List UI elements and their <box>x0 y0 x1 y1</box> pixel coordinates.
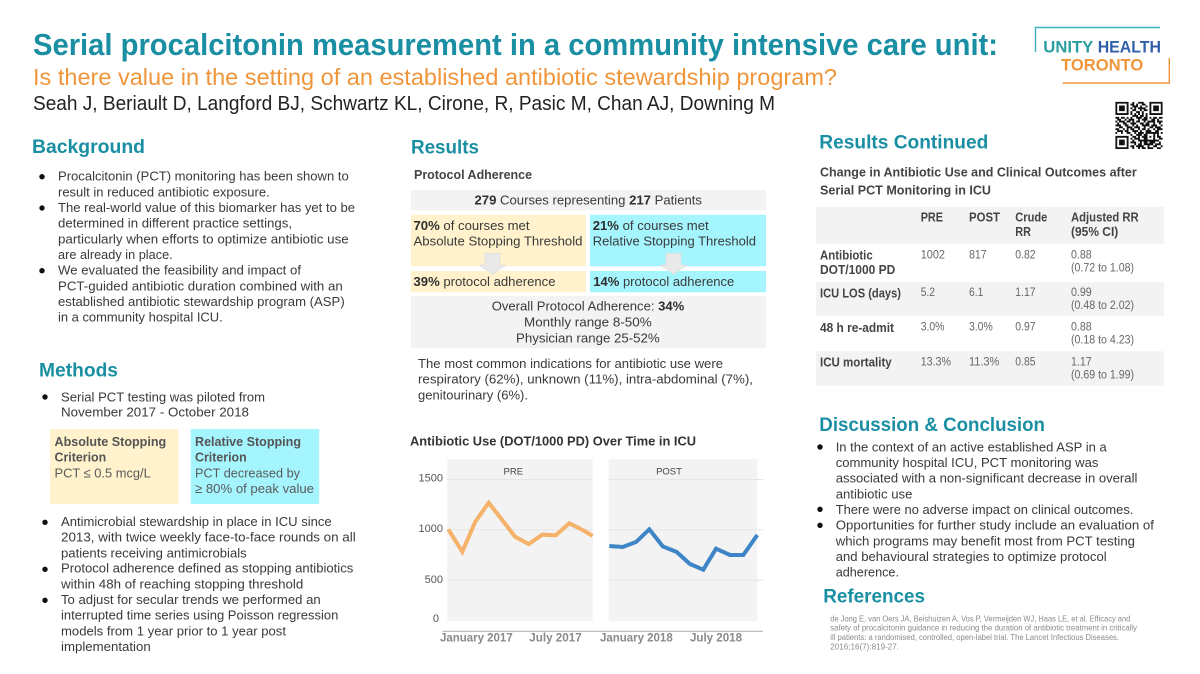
logo: Unity Health Toronto: HEALTH <box>1098 39 1161 57</box>
callout: absolute stopping criterion: Absolute Stopping <box>54 434 166 449</box>
box: absolute adherence: 39% protocol adherence <box>414 274 556 289</box>
methods bullet list: patients receiving antimicrobials <box>61 545 247 560</box>
panel: results continued <box>816 132 1164 386</box>
background bullet list: PCT-guided antibiotic duration combined with an <box>58 278 343 293</box>
row: ICU mortality: 0.85 <box>1015 356 1036 368</box>
row: 48 h re-admit: 0.88 <box>1071 322 1092 334</box>
panel label: PRE: PRE <box>504 466 523 477</box>
row: ICU mortality: (0.69 to 1.99) <box>1071 369 1134 381</box>
box: overall adherence: Physician range 25-52% <box>516 330 660 345</box>
heading: results continued: Results Continued <box>819 132 988 154</box>
row: ICU mortality: ICU mortality <box>820 356 892 370</box>
table header: RR <box>1015 225 1031 239</box>
row: 48 h re-admit: 3.0% <box>921 322 944 334</box>
background bullet list: in a community hospital ICU. <box>58 310 223 325</box>
discussion bullet list: There were no adverse impact on clinical outcomes. <box>836 502 1133 517</box>
background bullet list: result in reduced antibiotic exposure. <box>58 184 270 199</box>
box: relative threshold <box>590 215 766 266</box>
callout: absolute stopping criterion <box>50 429 178 504</box>
methods bullet list: implementation <box>61 639 151 654</box>
discussion bullet list: Opportunities for further study include an evaluation of <box>836 518 1154 533</box>
box: relative threshold: Relative Stopping Threshold <box>593 233 756 248</box>
stat bar: courses and patients <box>411 190 766 210</box>
subtitle: Is there value in the setting of an established antibiotic stewardship program? <box>33 64 837 90</box>
row: antibiotic DOT: (0.72 to 1.08) <box>1071 262 1134 274</box>
row: ICU LOS: 1.17 <box>1015 287 1036 299</box>
reference citation: ill patients: a randomised, controlled, open-label trial. The Lancet Infectious Diseases. <box>830 632 1119 642</box>
reference citation: de Jong E, van Oers JA, Beishuizen A, Vos P, Vermeijden WJ, Haas LE, et al. Efficacy and <box>830 613 1130 623</box>
callout: relative stopping criterion: PCT decreased by <box>195 465 300 480</box>
table caption: Serial PCT Monitoring in ICU <box>820 183 991 198</box>
row: antibiotic DOT: DOT/1000 PD <box>820 263 895 277</box>
row: ICU mortality: 13.3% <box>921 356 951 368</box>
row: ICU LOS: (0.48 to 2.02) <box>1071 300 1134 312</box>
y axis labels: 500 <box>425 574 443 586</box>
background bullet list: The real-world value of this biomarker has yet to be <box>58 200 355 215</box>
table header: (95% CI) <box>1071 225 1118 239</box>
panel: background <box>32 136 355 325</box>
row: ICU mortality <box>820 356 1134 381</box>
table header: Adjusted RR <box>1071 211 1139 225</box>
x axis labels: July 2017 <box>529 633 582 645</box>
box: absolute threshold: 70% of courses met <box>414 218 530 233</box>
text: common indications: respiratory (62%), unknown (11%), intra-abdominal (7%), <box>418 372 753 387</box>
text: common indications: The most common indications for antibiotic use were <box>418 356 723 371</box>
reference citation <box>830 613 1138 651</box>
box: overall adherence: Overall Protocol Adherence: 34% <box>492 299 684 314</box>
methods bullet list: Protocol adherence defined as stopping antibiotics <box>61 561 354 576</box>
x axis labels <box>440 633 743 645</box>
icon: QR code <box>1115 102 1163 150</box>
row: ICU LOS <box>820 286 1134 312</box>
y axis labels: 1000 <box>419 523 443 535</box>
discussion bullet list <box>817 439 1154 580</box>
box: absolute threshold <box>411 215 586 266</box>
y axis labels <box>419 473 443 625</box>
methods bullet list: within 48h of reaching stopping threshold <box>60 576 303 591</box>
row: 48 h re-admit <box>820 321 1134 347</box>
row: ICU LOS: 0.99 <box>1071 287 1092 299</box>
row: ICU LOS: 6.1 <box>969 287 983 299</box>
callout: relative stopping criterion: Criterion <box>195 450 247 465</box>
panel: discussion and conclusion <box>817 414 1154 580</box>
table caption: Change in Antibiotic Use and Clinical Outcomes after <box>820 165 1137 180</box>
heading: discussion and conclusion: Discussion & Conclusion <box>819 414 1045 436</box>
chart panel: pre <box>447 459 593 621</box>
background bullet list: We evaluated the feasibility and impact of <box>58 263 301 278</box>
box: relative threshold: 21% of courses met <box>593 218 709 233</box>
discussion bullet list: In the context of an active established ASP in a <box>836 439 1107 454</box>
row: ICU mortality: 1.17 <box>1071 356 1092 368</box>
background bullet list <box>39 169 355 325</box>
row: antibiotic DOT: Antibiotic <box>820 248 873 262</box>
discussion bullet list: adherence. <box>836 565 899 580</box>
logo: Unity Health Toronto: TORONTO <box>1061 57 1143 75</box>
methods bullet: pilot dates: Serial PCT testing was piloted from <box>61 389 265 404</box>
row: ICU LOS: 5.2 <box>921 287 935 299</box>
box: relative adherence <box>590 271 766 292</box>
methods bullet list: Antimicrobial stewardship in place in ICU since <box>61 514 332 529</box>
x axis labels: January 2018 <box>600 633 673 645</box>
background bullet list: established antibiotic stewardship program (ASP) <box>58 294 345 309</box>
row: antibiotic DOT <box>820 248 1134 277</box>
callout: absolute stopping criterion: PCT ≤ 0.5 mcg/L <box>54 465 151 480</box>
line: post period <box>609 529 757 570</box>
x axis labels: January 2017 <box>440 633 513 645</box>
callout: relative stopping criterion <box>191 429 319 504</box>
heading: methods: Methods <box>39 360 118 382</box>
box: absolute threshold: Absolute Stopping Threshold <box>414 233 582 248</box>
discussion bullet list: community hospital ICU, PCT monitoring was <box>836 455 1099 470</box>
callout: relative stopping criterion: ≥ 80% of peak value <box>195 481 314 496</box>
table header: PRE <box>921 211 943 225</box>
box: overall adherence: Monthly range 8-50% <box>524 315 652 330</box>
callout: relative stopping criterion: Relative Stopping <box>195 434 301 449</box>
logo: Unity Health Toronto: UNITY <box>1043 39 1093 57</box>
table header: POST <box>969 211 1000 225</box>
stat bar: courses and patients: 279 Courses representing 217 Patients <box>474 193 702 208</box>
box: overall adherence <box>411 296 766 348</box>
table header: Crude <box>1015 211 1047 225</box>
panel: results <box>411 136 766 402</box>
discussion bullet list: which programs may benefit most from PCT testing <box>835 533 1135 548</box>
authors: Seah J, Beriault D, Langford BJ, Schwartz KL, Cirone, R, Pasic M, Chan AJ, Downing M <box>33 92 775 115</box>
row: antibiotic DOT: 0.82 <box>1015 250 1036 262</box>
subheading: protocol adherence: Protocol Adherence <box>414 167 532 182</box>
panel: references <box>823 586 1138 651</box>
table: outcomes <box>816 207 1164 386</box>
heading: background: Background <box>32 136 145 158</box>
background bullet list: are already in place. <box>58 247 173 262</box>
box: relative adherence: 14% protocol adherence <box>593 274 734 289</box>
heading: results: Results <box>411 136 479 158</box>
box: absolute adherence <box>411 271 586 292</box>
row: 48 h re-admit: 48 h re-admit <box>820 321 895 335</box>
row: ICU LOS: ICU LOS (days) <box>820 286 901 300</box>
arrow: absolute threshold to adherence <box>479 253 506 274</box>
y axis labels: 0 <box>433 613 439 625</box>
arrow: relative threshold to adherence <box>660 253 687 274</box>
x axis labels: July 2018 <box>690 633 743 645</box>
row: 48 h re-admit: 0.97 <box>1015 322 1036 334</box>
methods bullet list <box>42 514 356 654</box>
row: 48 h re-admit: (0.18 to 4.23) <box>1071 335 1134 347</box>
background bullet list: Procalcitonin (PCT) monitoring has been shown to <box>58 169 349 184</box>
table caption <box>820 165 1137 198</box>
table header <box>921 211 1139 239</box>
reference citation: safety of procalcitonin guidance in reducing the duration of antibiotic treatment in critically <box>830 623 1138 633</box>
callout: absolute stopping criterion: Criterion <box>54 450 106 465</box>
discussion bullet list: antibiotic use <box>836 486 912 501</box>
methods bullet: pilot dates: November 2017 - October 2018 <box>61 405 249 420</box>
text: common indications: genitourinary (6%). <box>418 387 528 402</box>
methods bullet list: To adjust for secular trends we performed an <box>61 592 321 607</box>
panel label: POST: POST <box>656 466 682 477</box>
line: pre period <box>448 503 593 552</box>
y axis labels: 1500 <box>419 473 443 485</box>
heading: references: References <box>823 586 925 608</box>
discussion bullet list: and behavioural strategies to optimize protocol <box>836 549 1107 564</box>
discussion bullet list: associated with a non-significant decrease in overall <box>836 471 1137 486</box>
background bullet list: particularly when efforts to optimize antibiotic use <box>58 231 349 246</box>
title: Serial procalcitonin measurement in a community intensive care unit: <box>33 27 998 62</box>
row: 48 h re-admit: 3.0% <box>969 322 993 334</box>
panel: methods <box>39 360 356 654</box>
row: antibiotic DOT: 1002 <box>921 250 945 262</box>
reference citation: 2016;16(7):819-27. <box>830 641 899 651</box>
row: antibiotic DOT: 0.88 <box>1071 250 1092 262</box>
logo: Unity Health Toronto <box>1036 28 1169 83</box>
row: antibiotic DOT: 817 <box>969 250 987 262</box>
methods bullet list: models from 1 year prior to 1 year post <box>61 623 286 638</box>
line chart: antibiotic use over time <box>410 433 763 645</box>
chart title: Antibiotic Use (DOT/1000 PD) Over Time in ICU <box>410 433 696 448</box>
methods bullet list: interrupted time series using Poisson regression <box>61 608 338 623</box>
text: common indications <box>418 356 753 402</box>
chart panel: post <box>609 459 757 621</box>
methods bullet list: 2013, with twice weekly face-to-face rounds on all <box>61 530 356 545</box>
methods bullet: pilot dates <box>42 389 265 420</box>
background bullet list: determined in different practice settings, <box>58 216 292 231</box>
row: ICU mortality: 11.3% <box>969 356 999 368</box>
